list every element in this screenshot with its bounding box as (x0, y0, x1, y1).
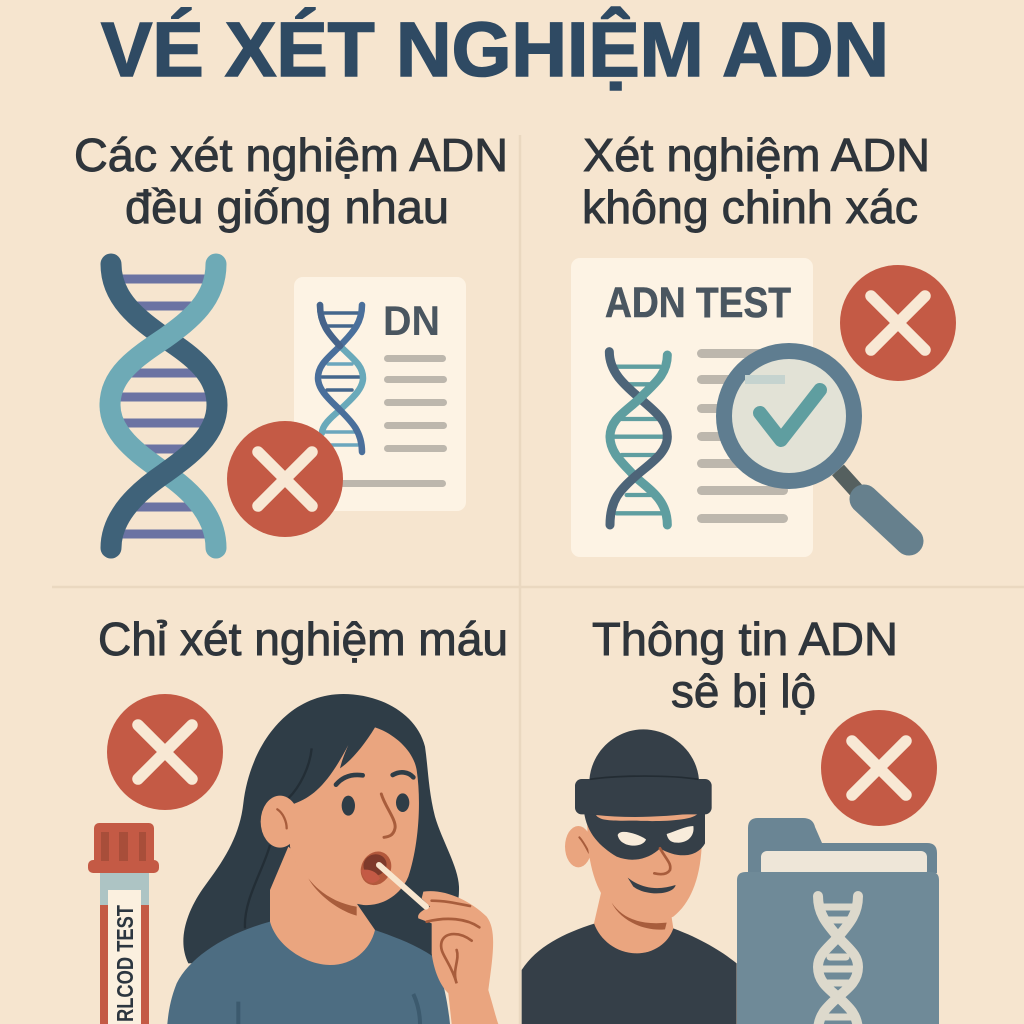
icon: blood tube (88, 823, 159, 1024)
heading: all tests are the same: Các xét nghiệm ADN (74, 129, 508, 181)
heading: tests are not accurate: Xét nghiệm ADN (583, 129, 930, 181)
panel: all tests are the same (74, 129, 508, 548)
icon: DNA helix on report (609, 352, 667, 525)
title: VÉ XÉT NGHIỆM ADN (101, 6, 889, 93)
illustration: woman swabbing cheek (167, 694, 498, 1024)
icon: red cross (840, 265, 956, 381)
document text lines (697, 349, 788, 523)
panel: only blood tests (88, 613, 508, 1024)
heading: DNA information will leak: sê bị lộ (671, 665, 816, 717)
heading: DNA information will leak: Thông tin ADN (592, 613, 898, 665)
heading: tests are not accurate (582, 129, 930, 233)
heading: tests are not accurate: không chinh xác (582, 181, 918, 233)
label: tube text: RLCOD TEST (112, 905, 138, 1022)
icon: red cross (821, 710, 937, 826)
document: ADN test report (571, 258, 813, 557)
icon: large DNA helix (110, 264, 217, 548)
label: DN: DN (383, 297, 440, 344)
panel: tests are not accurate (571, 129, 956, 557)
icon: red cross (227, 421, 343, 537)
heading: DNA information will leak (592, 613, 898, 717)
icon: magnifying glass with check (724, 351, 909, 541)
icon: small DNA helix (318, 305, 363, 452)
icon: DNA helix on folder (818, 896, 858, 1024)
document text lines (335, 355, 447, 487)
document with DNA (294, 277, 466, 511)
label: ADN TEST: ADN TEST (605, 279, 791, 327)
icon: red cross (107, 694, 223, 810)
icon: folder with DNA (737, 818, 939, 1024)
heading: only blood tests: Chỉ xét nghiệm máu (98, 613, 508, 665)
illustration: masked thief (522, 729, 737, 1024)
panel: DNA information will leak (522, 613, 939, 1024)
heading: all tests are the same (74, 129, 508, 233)
heading: all tests are the same: đều giống nhau (125, 181, 449, 233)
